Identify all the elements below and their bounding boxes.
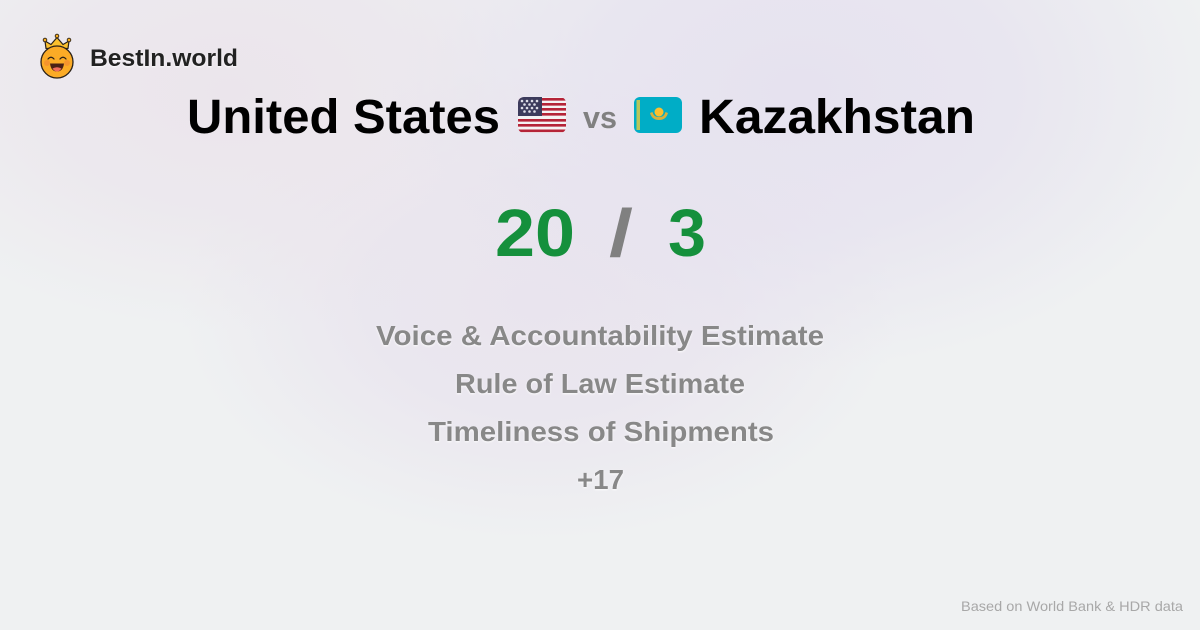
icon: Kazakhstan flag [634, 97, 682, 133]
title: United States: United States [187, 91, 500, 144]
vs label: vs [583, 100, 617, 135]
score: Kazakhstan wins: 3 [668, 196, 706, 271]
metric: Voice & Accountability Estimate: Voice & Accountability Estimate [376, 320, 824, 351]
score: United States wins: 20 [495, 196, 575, 271]
icon: United States flag [518, 97, 566, 133]
list of winning metrics [376, 320, 824, 495]
logo: crown smiley icon [41, 34, 73, 78]
metric: Timeliness of Shipments: Timeliness of Shipments [428, 416, 774, 447]
metric: Rule of Law Estimate: Rule of Law Estimate [455, 368, 745, 399]
score separator: / [609, 196, 633, 271]
metric: +17 more: +17 [577, 464, 624, 495]
footer source note: Based on World Bank & HDR data [961, 598, 1183, 614]
logo wordmark: BestIn.world [90, 45, 238, 72]
title: Kazakhstan: Kazakhstan [699, 91, 975, 144]
